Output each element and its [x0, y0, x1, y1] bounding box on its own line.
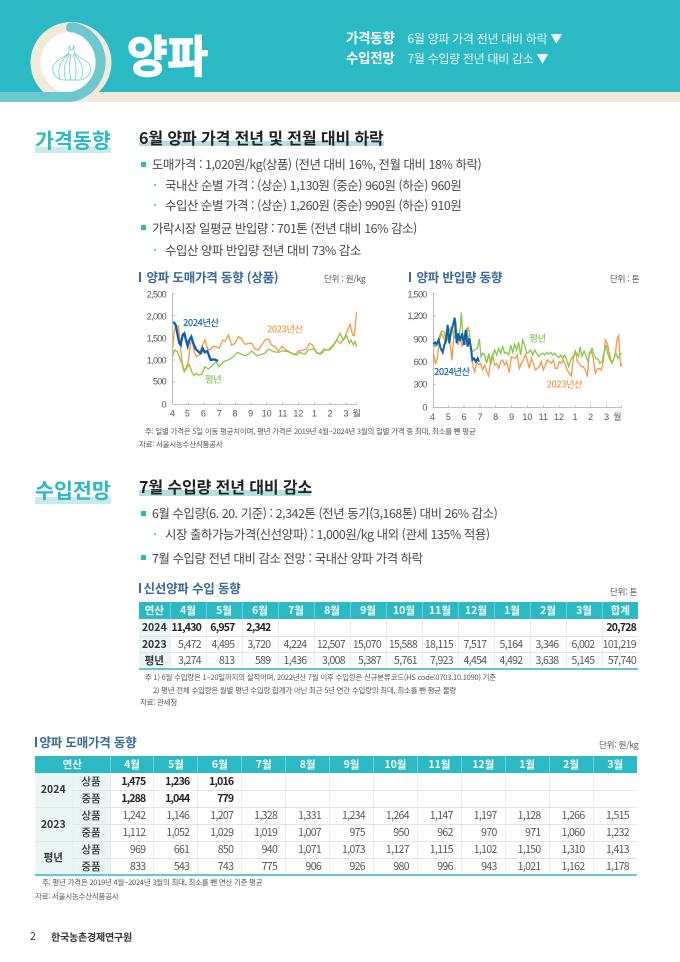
table: wholesale prices: 950: [393, 825, 409, 840]
footnote: imports table: 자료: 관세청: [140, 697, 177, 708]
table: fresh onion imports: 3,346: [536, 636, 558, 652]
unit label: 단위 : 원/kg: [324, 273, 366, 285]
title: 양파: [127, 21, 208, 85]
line chart: 4: [170, 409, 175, 419]
footnote: wholesale table: [35, 877, 262, 902]
table: wholesale prices: 6월: [212, 757, 228, 772]
table: wholesale prices: 543: [174, 859, 189, 874]
line chart: 6: [201, 409, 206, 419]
line chart: 10: [522, 412, 532, 422]
table: fresh onion imports: 2023: [142, 636, 167, 652]
table: wholesale prices: 1,112: [122, 825, 145, 840]
table: wholesale prices: 1,021: [518, 859, 541, 874]
line chart: 2024년산: [434, 364, 471, 378]
line chart: 7: [217, 409, 222, 419]
line chart: 2,500: [147, 289, 167, 299]
line chart: 11: [278, 409, 287, 419]
table: fresh onion imports: 3,008: [322, 653, 345, 668]
line chart: 3: [604, 412, 609, 422]
table: wholesale prices: 970: [481, 825, 497, 840]
line chart: 평년: [529, 331, 546, 345]
table: wholesale prices: 12월: [472, 757, 494, 772]
line chart: 9: [509, 412, 514, 422]
table: wholesale prices: 1,236: [165, 774, 189, 789]
line chart: 2: [327, 409, 333, 419]
panel: market arrivals chart: [407, 267, 640, 422]
table: wholesale prices: 1,162: [562, 859, 585, 874]
section heading: import: 7월 수입량 전년 대비 감소: [139, 474, 312, 498]
table: fresh onion imports: 9월: [360, 603, 376, 618]
line chart: 월: [613, 411, 621, 422]
table: fresh onion imports: 15,070: [353, 636, 381, 652]
table: wholesale prices: 1,060: [562, 825, 585, 840]
section label: price trend: 가격동향: [35, 124, 111, 154]
panel: wholesale price chart: [139, 267, 366, 419]
line chart: 2023년산: [267, 322, 304, 336]
line chart: 900: [414, 334, 427, 344]
table: fresh onion imports: 12월: [465, 603, 487, 618]
table: wholesale prices: 10월: [384, 757, 406, 772]
table: fresh onion imports: 5,761: [394, 653, 417, 668]
table: wholesale prices: 1,044: [165, 791, 189, 806]
table: fresh onion imports: 4월: [180, 603, 196, 618]
table: wholesale prices: 중품: [81, 791, 101, 806]
table: wholesale prices: 1,019: [254, 825, 277, 840]
line chart: 300: [414, 380, 427, 390]
line chart: 2023년산: [547, 376, 583, 390]
table: fresh onion imports: 2,342: [246, 620, 270, 635]
table: fresh onion imports: 1,436: [284, 653, 306, 668]
table: wholesale prices: 2월: [563, 757, 579, 772]
table: wholesale prices: 1,127: [386, 842, 409, 857]
header banner: [0, 0, 680, 102]
table: wholesale prices: 980: [393, 859, 409, 874]
table: wholesale prices: 971: [525, 825, 541, 840]
table: wholesale prices: 상품: [81, 774, 101, 789]
table: wholesale prices: [35, 756, 637, 876]
line chart: [407, 289, 622, 422]
unit label: 단위: 원/kg: [599, 739, 638, 751]
table: wholesale prices: 중품: [81, 859, 101, 874]
footnote: wholesale table: 자료: 서울시농수산식품공사: [35, 890, 118, 902]
table: wholesale prices: 743: [218, 859, 233, 874]
header cream band: [0, 92, 680, 102]
unit label: 단위 : 톤: [610, 273, 639, 285]
table: wholesale prices: 1,147: [430, 808, 453, 823]
footnote: imports table: 주 1) 6월 수입량은 1~20일까지의 실적이며, 2022년산 7월 이후 수입량은 신규분류코드(HS code:0703.10.1090) 기준: [145, 672, 496, 683]
line chart: 2: [588, 412, 593, 422]
table: wholesale prices: 1,234: [342, 808, 365, 823]
table: fresh onion imports: 7월: [288, 603, 304, 618]
table: fresh onion imports: 7,517: [464, 636, 486, 652]
table: fresh onion imports: 20,728: [606, 620, 636, 635]
line chart: 8: [493, 412, 498, 422]
line chart: 1: [312, 409, 317, 419]
table: wholesale prices: 1,266: [562, 808, 585, 823]
line chart: 1,500: [147, 334, 167, 344]
line chart: 0: [422, 403, 427, 413]
table: fresh onion imports: 3,274: [178, 653, 201, 668]
table: fresh onion imports: 6,957: [210, 620, 234, 635]
table: wholesale prices: 8월: [300, 757, 316, 772]
icon: onion badge: [0, 22, 112, 102]
table: wholesale prices: 1,475: [121, 774, 145, 789]
table: wholesale prices: 1,328: [254, 808, 277, 823]
table: wholesale prices: 906: [306, 859, 321, 874]
table: fresh onion imports: 3,638: [536, 653, 558, 668]
table: wholesale prices: 1월: [519, 757, 535, 772]
table: wholesale prices: 975: [349, 825, 365, 840]
table: wholesale prices: 1,264: [386, 808, 409, 823]
line chart: 600: [414, 357, 427, 367]
table: wholesale prices: 1,207: [210, 808, 233, 823]
table: fresh onion imports: 18,115: [425, 636, 453, 652]
table: fresh onion imports: 15,588: [389, 636, 417, 652]
table: wholesale prices: 연산: [63, 757, 82, 772]
table: fresh onion imports: 101,219: [603, 636, 636, 652]
footnote: imports table: [140, 672, 496, 708]
table: wholesale prices: 중품: [81, 825, 101, 840]
line chart: 평년: [205, 371, 221, 385]
table: wholesale prices: 850: [218, 842, 233, 857]
table: wholesale prices: 1,052: [166, 825, 189, 840]
line chart: 1: [572, 412, 578, 422]
text block: price bullets: 도매가격 : 1,020원/kg(상품) (전년 대비 16%, 전월 대비 18% 하락): [152, 155, 481, 173]
table: fresh onion imports: [139, 602, 638, 670]
line chart: 2,000: [147, 311, 167, 321]
text block: import bullets: 시장 출하가능가격(신선양파) : 1,000원/kg 내외 (관세 135% 적용): [165, 525, 490, 543]
table: wholesale prices: 926: [349, 859, 365, 874]
table: fresh onion imports: 4,495: [212, 636, 234, 652]
text block: price bullets: 가락시장 일평균 반입량 : 701톤 (전년 대비 16% 감소): [152, 219, 417, 237]
table: wholesale prices: 1,115: [430, 842, 453, 857]
line chart: 3: [343, 409, 349, 419]
table: fresh onion imports: 5월: [216, 603, 232, 618]
table: fresh onion imports: 합계: [611, 603, 630, 618]
line chart: 1,500: [407, 289, 427, 299]
table: wholesale prices: 5월: [168, 757, 184, 772]
table: wholesale prices: 1,128: [518, 808, 541, 823]
table: wholesale prices: 2024: [41, 782, 66, 797]
table: fresh onion imports: 3,720: [248, 636, 270, 652]
line chart: 11: [539, 412, 548, 422]
table: wholesale prices: 1,102: [474, 842, 497, 857]
footnote: price chart: 자료: 서울시농수산식품공사: [139, 439, 222, 450]
section heading: price: 6월 양파 가격 전년 및 전월 대비 하락: [139, 125, 384, 149]
table: wholesale prices: 779: [217, 791, 233, 806]
table: fresh onion imports: 3월: [576, 603, 592, 618]
text block: import bullets: 6월 수입량(6. 20. 기준) : 2,342톤 (전년 동기(3,168톤) 대비 26% 감소): [152, 504, 497, 522]
table: wholesale prices: 943: [481, 859, 497, 874]
text block: import bullets: 7월 수입량 전년 대비 감소 전망 : 국내산 양파 가격 하락: [152, 549, 423, 567]
chart heading: 양파 반입량 동향: [416, 267, 502, 286]
text block: import bullets: [141, 504, 497, 567]
table: fresh onion imports: 7,923: [430, 653, 453, 668]
line chart: 6: [461, 412, 467, 422]
line chart: 500: [153, 376, 167, 386]
table: fresh onion imports: 589: [255, 653, 270, 668]
table: fresh onion imports: 8월: [324, 603, 340, 618]
table: wholesale prices: 1,197: [474, 808, 497, 823]
table: wholesale prices: 833: [130, 859, 145, 874]
table: fresh onion imports: 연산: [145, 603, 164, 618]
table: wholesale prices: 962: [437, 825, 453, 840]
table: fresh onion imports: 5,472: [178, 636, 201, 652]
table: fresh onion imports: 10월: [393, 603, 415, 618]
line chart: 5: [446, 412, 451, 422]
table: fresh onion imports: 1월: [504, 603, 520, 618]
table: wholesale prices: 9월: [344, 757, 359, 772]
table: wholesale prices: 상품: [81, 808, 101, 823]
table: fresh onion imports: 6,002: [572, 636, 594, 652]
footnote: price chart: 주: 일별 가격은 5일 이동 평균치이며, 평년 가격은 2019년 4월~2024년 3월의 일별 가격 중 최대, 최소를 뺀 평균: [145, 426, 476, 437]
table: wholesale prices: 1,016: [209, 774, 233, 789]
table: fresh onion imports: 12,507: [317, 636, 345, 652]
table: wholesale prices: 1,146: [166, 808, 189, 823]
summary: price trend: 가격동향 6월 양파 가격 전년 대비 하락 ▼: [346, 27, 562, 47]
table: wholesale prices: 1,029: [210, 825, 233, 840]
table: wholesale prices: 1,073: [342, 842, 365, 857]
footnote: wholesale table: 주: 평년 가격은 2019년 4월~2024년 3월의 최대, 최소를 뺀 연산 기준 평균: [42, 877, 262, 888]
table: wholesale prices: 1,331: [298, 808, 321, 823]
table: wholesale prices: 상품: [81, 842, 101, 857]
table: wholesale prices: 775: [262, 859, 277, 874]
line chart: 1,200: [407, 311, 427, 321]
line chart: 8: [232, 409, 238, 419]
table: fresh onion imports: 4,492: [500, 653, 522, 668]
line chart: 월: [353, 408, 361, 419]
table: wholesale prices: 969: [130, 842, 145, 857]
footnote: price chart: [139, 426, 476, 450]
footnote: imports table: 2) 평년 전체 수입량은 월별 평년 수입량 합계가 아닌 최근 5년 연간 수입량의 최대, 최소를 뺀 평균 물량: [153, 684, 456, 696]
table heading: wholesale prices: 양파 도매가격 동향: [40, 732, 137, 751]
line chart: 10: [262, 409, 272, 419]
table: fresh onion imports: 11월: [429, 603, 451, 618]
table: wholesale prices: 11월: [428, 757, 450, 772]
table: fresh onion imports: 5,145: [572, 653, 594, 668]
table: fresh onion imports: 4,454: [464, 653, 486, 668]
line chart: 2024년산: [183, 315, 220, 329]
table: fresh onion imports: 813: [219, 653, 234, 668]
table: wholesale prices: 1,071: [298, 842, 321, 857]
table: wholesale prices: 1,515: [606, 808, 629, 823]
table: fresh onion imports: 4,224: [284, 636, 306, 652]
line chart: 12: [554, 412, 564, 422]
footer: publisher: 한국농촌경제연구원: [51, 929, 132, 944]
table: wholesale prices: 1,413: [606, 842, 629, 857]
table: wholesale prices: 661: [174, 842, 189, 857]
table: fresh onion imports: 11,430: [171, 620, 201, 635]
table: wholesale prices: 평년: [44, 850, 63, 865]
table: fresh onion imports: 57,740: [608, 653, 636, 668]
table: wholesale prices: 4월: [124, 757, 140, 772]
line chart: 0: [162, 400, 167, 410]
line chart: 9: [248, 409, 253, 419]
chart heading: 양파 도매가격 동향 (상품): [146, 267, 278, 286]
table: wholesale prices: 1,007: [298, 825, 321, 840]
section label: import outlook: 수입전망: [35, 474, 111, 504]
table: fresh onion imports: 2024: [142, 620, 167, 635]
table: wholesale prices: 7월: [256, 757, 272, 772]
table: fresh onion imports: 5,387: [358, 653, 381, 668]
table: wholesale prices: 1,232: [606, 825, 629, 840]
table: fresh onion imports: 6월: [252, 603, 268, 618]
line chart: [147, 289, 361, 419]
line chart: 1,000: [147, 356, 167, 366]
table: wholesale prices: 1,178: [606, 859, 629, 874]
table: fresh onion imports: 평년: [145, 653, 164, 668]
line chart: 12: [293, 409, 303, 419]
table: wholesale prices: 940: [262, 842, 277, 857]
table: wholesale prices: 1,242: [122, 808, 145, 823]
text block: price bullets: 수입산 양파 반입량 전년 대비 73% 감소: [165, 241, 361, 259]
line chart: 4: [430, 412, 435, 422]
line chart: 7: [477, 412, 483, 422]
table: wholesale prices: 2023: [41, 816, 66, 832]
page number: 2: [30, 929, 36, 944]
unit label: 단위: 톤: [610, 586, 637, 598]
table: wholesale prices: 1,310: [562, 842, 585, 857]
table: wholesale prices: 996: [437, 859, 453, 874]
text block: price bullets: 국내산 순별 가격 : (상순) 1,130원 (중순) 960원 (하순) 960원: [165, 176, 461, 194]
table heading: fresh onion imports: 신선양파 수입 동향: [144, 578, 241, 597]
table: wholesale prices: 1,288: [121, 791, 145, 806]
table: wholesale prices: 3월: [607, 757, 623, 772]
table: fresh onion imports: 5,164: [500, 636, 522, 652]
line chart: 5: [185, 409, 190, 419]
text block: price bullets: [141, 155, 481, 259]
text block: price bullets: 수입산 순별 가격 : (상순) 1,260원 (중순) 990원 (하순) 910원: [165, 196, 461, 214]
table: fresh onion imports: 2월: [540, 603, 556, 618]
table: wholesale prices: 1,150: [518, 842, 541, 857]
summary: import outlook: 수입전망 7월 수입량 전년 대비 감소 ▼: [346, 47, 548, 67]
